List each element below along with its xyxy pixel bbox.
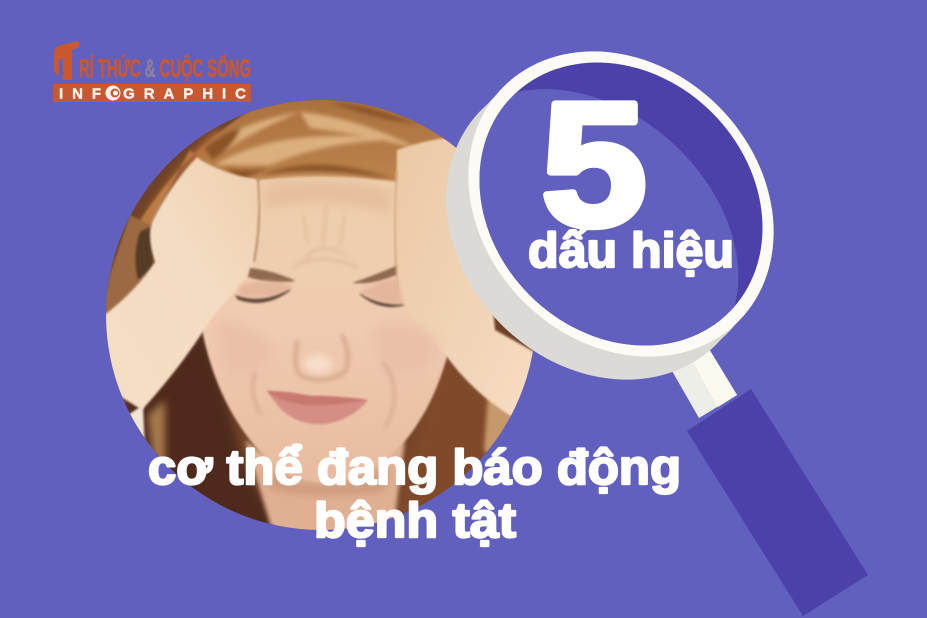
handle grip xyxy=(687,389,868,616)
right finger crease xyxy=(395,170,398,290)
eyelid shading xyxy=(238,278,404,305)
hair lower left highlight xyxy=(148,400,165,475)
lips xyxy=(267,391,368,424)
hair left patch xyxy=(106,215,154,314)
right eye lashes xyxy=(360,294,404,307)
neck xyxy=(245,440,405,540)
logo: infographic label: INF GRAPHIC xyxy=(59,86,246,102)
heading: dấu hiệu: dấu hiệu xyxy=(528,224,734,278)
logo: masthead name: RÍ THỨC & CUỘC SỐNG xyxy=(79,53,251,83)
hair warm left band xyxy=(140,128,222,222)
lens light area xyxy=(480,89,738,346)
upper lip xyxy=(267,391,368,405)
finger crease forehead xyxy=(254,178,259,262)
forehead wrinkles xyxy=(294,210,356,268)
logo: infographic bar xyxy=(53,84,251,102)
right eyebrow xyxy=(352,266,396,283)
nose shadow xyxy=(295,335,348,380)
left arm and hand xyxy=(100,157,258,410)
lens back rim xyxy=(384,1,825,442)
handle neck xyxy=(660,344,737,418)
number five: 5 xyxy=(541,67,647,263)
heading: bệnh tật: bệnh tật xyxy=(314,494,516,548)
face xyxy=(202,170,450,483)
logo: big letter T xyxy=(54,41,79,80)
logo xyxy=(53,41,251,102)
left eye lashes xyxy=(236,290,290,302)
lens glass xyxy=(479,62,762,346)
lens front rim xyxy=(406,0,836,419)
left eyebrow xyxy=(248,268,296,282)
smile lines xyxy=(253,362,395,428)
hair lower right xyxy=(390,360,516,519)
hair dark streaks xyxy=(205,102,420,180)
chin shadow on neck xyxy=(268,472,389,496)
hair right blond edge xyxy=(482,398,512,454)
hair top xyxy=(106,100,456,308)
magnifying glass xyxy=(446,51,868,616)
right arm and hand xyxy=(395,137,533,417)
logo: swirl O icon xyxy=(106,86,120,100)
photo: woman holding her head xyxy=(100,92,545,545)
cheek blush xyxy=(222,325,438,358)
hair highlights xyxy=(215,112,420,165)
forehead shading xyxy=(262,179,392,215)
heading: cơ thể đang báo động: cơ thể đang báo động xyxy=(148,441,681,495)
shirt sliver xyxy=(130,406,146,440)
nose highlight xyxy=(304,355,332,373)
hair left dark patch xyxy=(135,227,156,280)
hair lower left xyxy=(124,334,279,526)
